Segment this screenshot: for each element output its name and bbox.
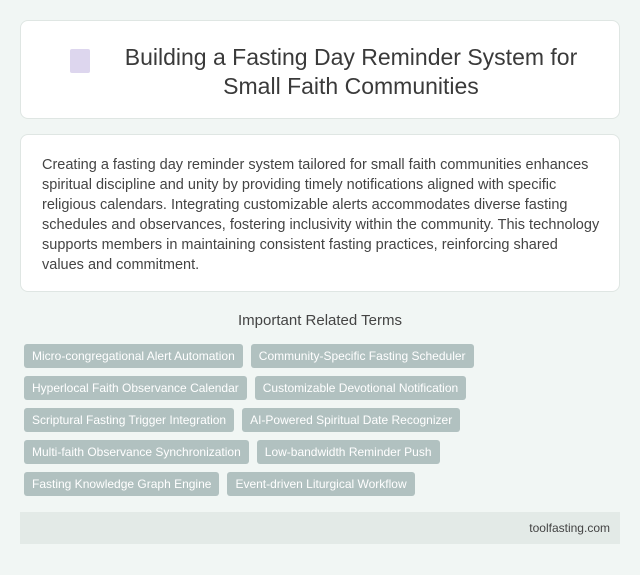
- description card: schedules and observances, fostering inclusivity within the community. This technology: [42, 217, 599, 233]
- icon: scroll: [70, 49, 90, 73]
- tags: Customizable Devotional Notification: [263, 381, 458, 395]
- tags: Scriptural Fasting Trigger Integration: [32, 413, 226, 427]
- footer: toolfasting.com: [529, 521, 610, 535]
- description card: [20, 134, 620, 292]
- description card: Creating a fasting day reminder system tailored for small faith communities enhances: [42, 157, 588, 173]
- description card: values and commitment.: [42, 257, 199, 273]
- tags: Fasting Knowledge Graph Engine: [32, 477, 211, 491]
- tags: Hyperlocal Faith Observance Calendar: [32, 381, 239, 395]
- tags: AI-Powered Spiritual Date Recognizer: [250, 413, 452, 427]
- tags: Community-Specific Fasting Scheduler: [259, 349, 466, 363]
- tags: Multi-faith Observance Synchronization: [32, 445, 241, 459]
- tags: Micro-congregational Alert Automation: [32, 349, 235, 363]
- footer: [20, 512, 620, 544]
- tags: Low-bandwidth Reminder Push: [265, 445, 432, 459]
- tags: Event-driven Liturgical Workflow: [235, 477, 407, 491]
- header card: [20, 20, 620, 119]
- description card: religious calendars. Integrating customizable alerts accommodates diverse fasting: [42, 197, 567, 213]
- section heading: Important Related Terms: [238, 312, 402, 329]
- title: Building a Fasting Day Reminder System for Small Faith Communities: [125, 44, 577, 99]
- description card: supports members in maintaining consistent fasting practices, reinforcing shared: [42, 237, 558, 253]
- description card: spiritual discipline and unity by providing timely notifications aligned with specific: [42, 177, 556, 193]
- tags: [24, 344, 474, 496]
